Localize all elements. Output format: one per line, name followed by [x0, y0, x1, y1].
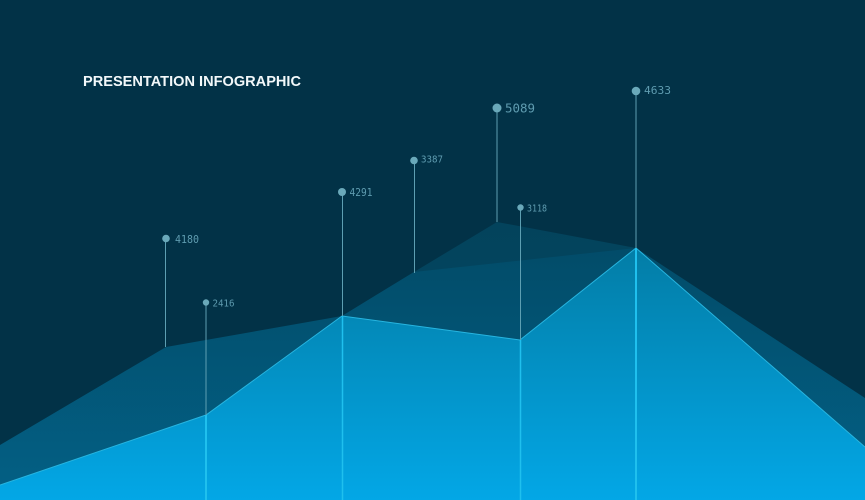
area chart	[0, 222, 865, 500]
marker 4291	[338, 187, 372, 500]
marker 4180	[162, 234, 199, 347]
marker 4180: 4180	[175, 234, 199, 246]
marker 2416: 2416	[212, 298, 235, 310]
marker 3387: 3387	[421, 154, 443, 166]
marker 5089	[492, 100, 535, 222]
marker 4633	[632, 85, 671, 500]
marker 4633: 4633	[644, 85, 671, 97]
marker 3118	[517, 204, 547, 500]
marker 2416	[203, 298, 235, 500]
title: PRESENTATION INFOGRAPHIC	[83, 73, 301, 90]
marker 4291: 4291	[350, 187, 372, 199]
marker 3118: 3118	[527, 204, 547, 214]
front series outline	[0, 248, 865, 485]
back area series	[342, 222, 636, 340]
middle area series	[0, 248, 865, 500]
marker 3387	[410, 154, 443, 273]
marker 5089: 5089	[505, 100, 535, 116]
front area series	[0, 248, 865, 500]
